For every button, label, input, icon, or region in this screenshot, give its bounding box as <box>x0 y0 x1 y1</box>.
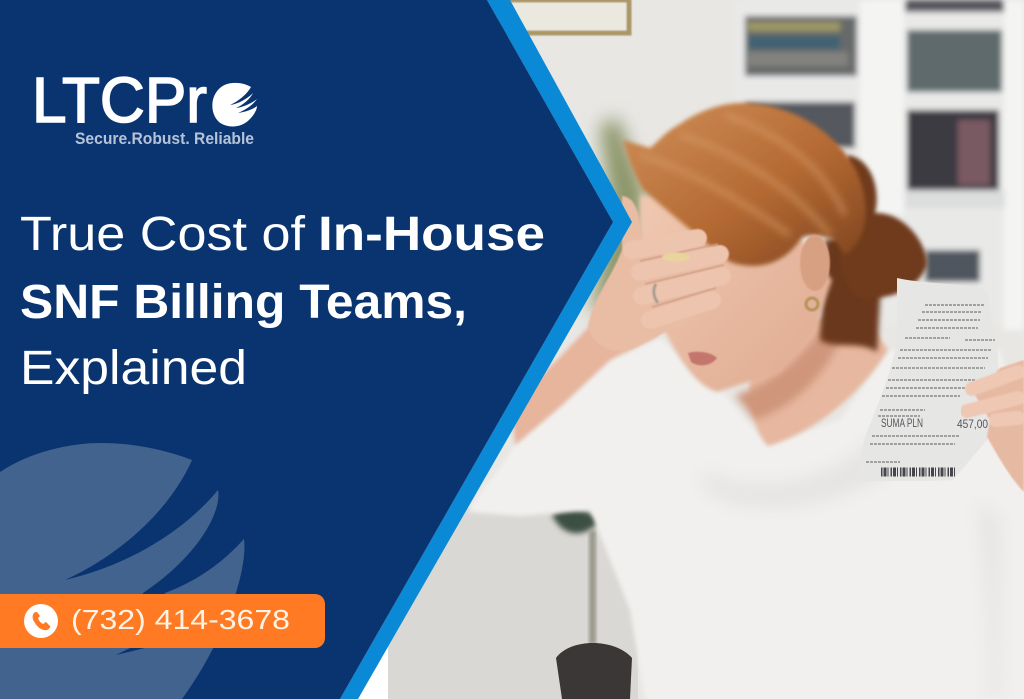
title line 2 bold: SNF Billing Teams, <box>20 276 467 329</box>
light blue chevron band <box>340 0 632 699</box>
logo: LTCPro <box>32 64 257 148</box>
watermark: globe logo <box>0 443 244 699</box>
photo: receipt <box>855 278 998 482</box>
photo: blurred plant <box>552 118 645 645</box>
photo: hand over eyes <box>588 196 724 351</box>
photo: silver ring <box>654 284 658 303</box>
title line 1 light: True Cost of <box>20 208 306 261</box>
photo: shirt base <box>648 460 1024 699</box>
receipt total: SUMA PLN <box>881 416 923 430</box>
background photo: woman holding receipt <box>388 0 1024 699</box>
photo: jaw shadow <box>735 325 840 420</box>
photo: picture frame <box>502 0 629 33</box>
title <box>20 208 545 395</box>
photo: bookshelf <box>735 0 1024 330</box>
photo: ear and earring <box>800 235 830 310</box>
photo: plant pot <box>556 643 632 699</box>
title line 3 light: Explained <box>20 342 247 395</box>
receipt print lines <box>866 305 995 462</box>
photo: hair highlights <box>640 115 845 235</box>
pill background <box>0 594 325 648</box>
photo: hair bun <box>838 155 927 298</box>
phone number: (732) 414-3678 <box>71 604 290 635</box>
receipt amount: 457,00 <box>957 417 988 431</box>
photo: gold ring <box>662 252 690 262</box>
logo tagline: Secure.Robust. Reliable <box>75 129 254 148</box>
navy chevron panel <box>0 0 613 699</box>
photo: room wall <box>468 0 1024 699</box>
photo: right hand holding receipt <box>967 360 1024 492</box>
photo: neck <box>750 310 888 446</box>
photo: hair behind neck <box>820 225 885 352</box>
logo globe <box>212 83 257 127</box>
logo wordmark: LTCPr <box>32 64 207 136</box>
photo: shirt shadows <box>718 455 994 546</box>
photo: lips <box>688 352 717 365</box>
photo: face <box>640 195 832 392</box>
photo: lower wall <box>388 508 638 699</box>
icon: phone <box>24 604 58 638</box>
photo: hair <box>623 103 866 266</box>
photo: white shirt <box>468 338 1024 699</box>
receipt paper <box>855 278 998 482</box>
title line 1 bold: In-House <box>318 208 545 261</box>
phone call-to-action pill <box>0 594 325 648</box>
photo: raised arm <box>512 315 660 445</box>
receipt barcode <box>881 468 955 476</box>
